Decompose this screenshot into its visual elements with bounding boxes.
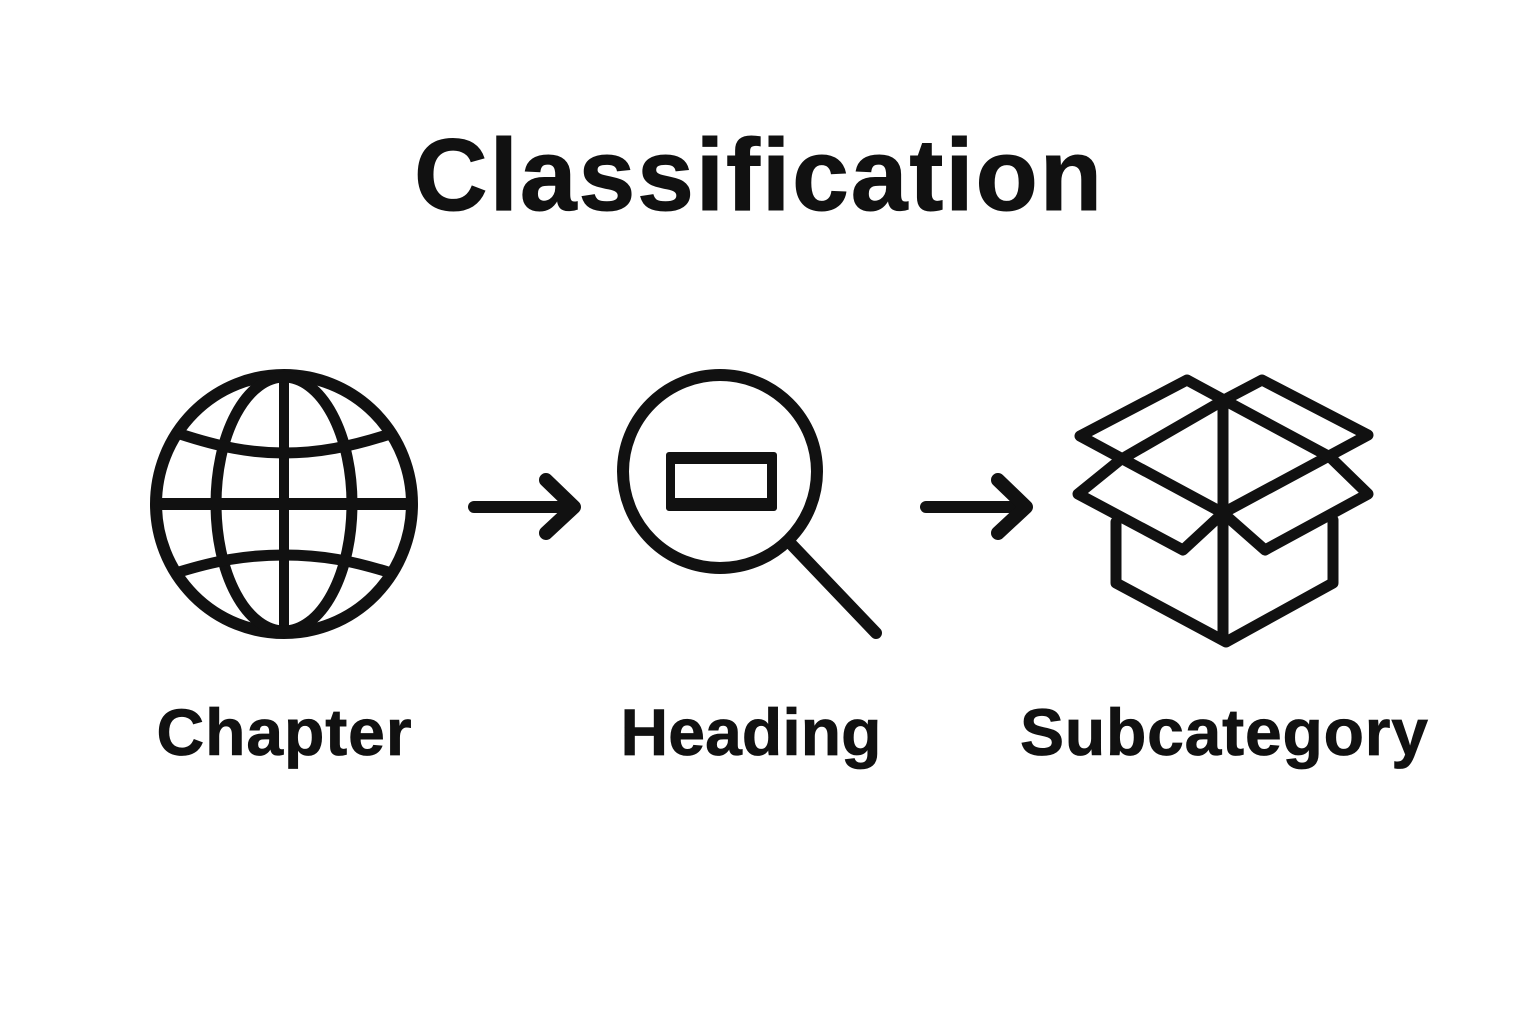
label: Heading: Heading [620,695,882,769]
arrow: chapter to heading [474,480,574,533]
label: Chapter: Chapter [156,695,412,769]
icon: open box [1078,380,1368,642]
icon: magnifying glass [623,375,876,633]
arrow: heading to subcategory [926,480,1026,533]
label: Subcategory: Subcategory [1020,695,1428,769]
icon: globe [156,375,412,633]
title: Classification [414,118,1102,232]
